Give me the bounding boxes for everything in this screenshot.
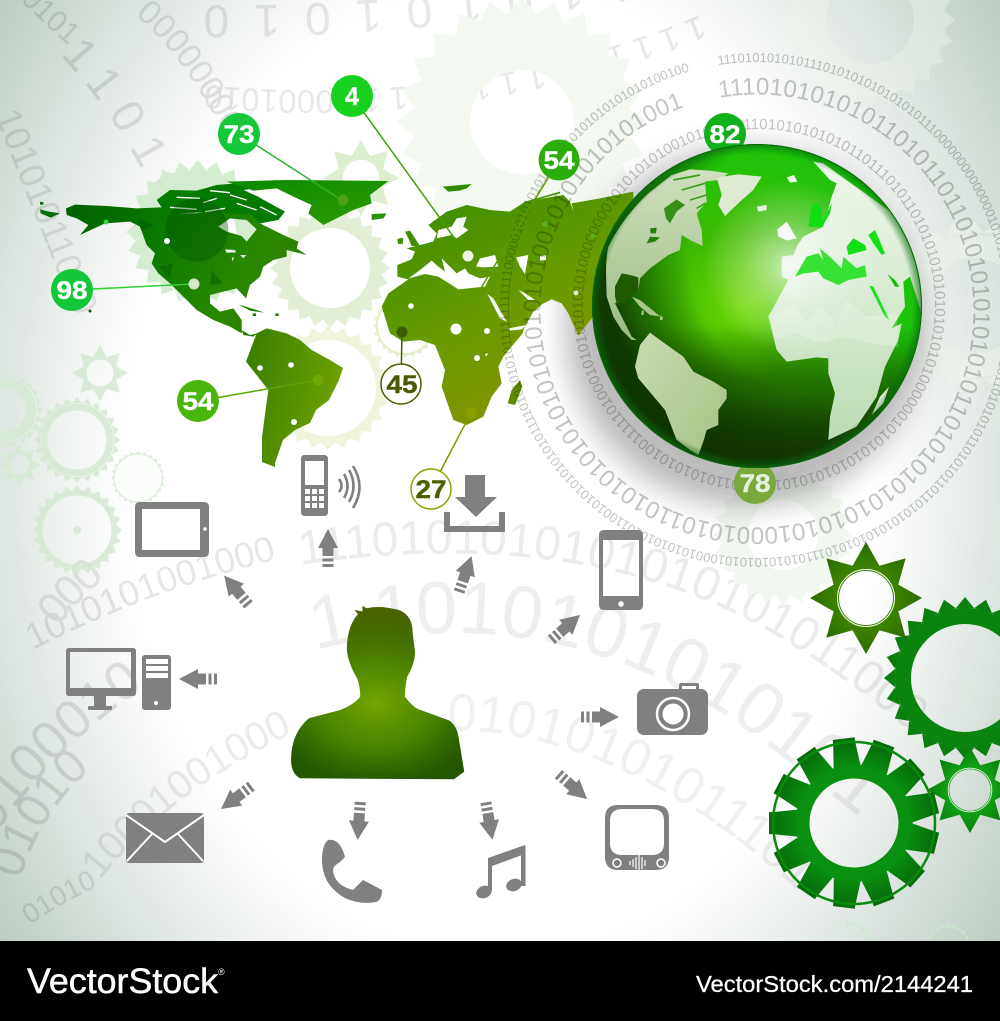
- background binary digits: 000: [39, 560, 100, 622]
- badge: 98: 98: [56, 277, 88, 305]
- Britain: [777, 222, 797, 241]
- arrow: to camera: [581, 707, 619, 727]
- gear shadow on Canada: [137, 198, 228, 285]
- arrow: to download: [450, 553, 481, 595]
- Madagascar on globe: [872, 387, 889, 415]
- icon: mobile phone with signal: [301, 455, 360, 516]
- background binary digits: 1010101001000: [27, 537, 273, 648]
- globe shadow: [565, 147, 925, 507]
- gear: star olive: [810, 542, 922, 654]
- Novaya Zemlya: [525, 192, 560, 202]
- globe: [590, 140, 930, 470]
- gears: left column: [0, 345, 169, 581]
- watermark logo: ®: [218, 967, 225, 977]
- arrow: to computer: [179, 669, 217, 689]
- Greenland on globe: [717, 174, 762, 216]
- badge: 73: 73: [224, 121, 254, 149]
- arrow: to tablet: [216, 569, 256, 611]
- Arctic channels: [170, 191, 277, 215]
- gear: West Africa: [369, 290, 441, 362]
- Iceland: [372, 213, 387, 220]
- gear: behind North America: [117, 151, 279, 313]
- binary rings around globe: [500, 52, 1000, 568]
- Aleutian islands: [40, 202, 60, 218]
- icon: tablet: [135, 502, 209, 557]
- gear: right of globe: [878, 210, 1000, 402]
- badge: 78: 78: [740, 470, 771, 498]
- Hudson Bay: [664, 199, 685, 223]
- Old World group: [372, 184, 633, 425]
- badge: 45: 45: [386, 371, 418, 399]
- icon: music note: [474, 845, 526, 901]
- icon: television: [605, 805, 669, 870]
- badge: 54 north: 54: [544, 147, 575, 175]
- watermark url: VectorStock.com/2144241: [696, 971, 973, 997]
- background binary digits: 01010: [22, 872, 94, 922]
- badge: 54 south: 54: [182, 388, 214, 416]
- Greenland: [227, 180, 388, 225]
- Canadian Arctic islands: [157, 180, 285, 223]
- map callouts: [51, 75, 776, 509]
- badge: 82: 82: [710, 121, 740, 149]
- gear: under globe: [704, 456, 862, 614]
- badge: 45: [381, 364, 421, 404]
- badge: 4: 4: [345, 83, 359, 111]
- badge: 54 north: [538, 140, 580, 180]
- background binary digits: 1110101010101010101011000: [301, 520, 926, 726]
- Great Lakes: [647, 228, 660, 243]
- arrow: to telephone: [348, 801, 370, 841]
- Caspian Sea: [868, 230, 885, 255]
- gear: large top centre: [381, 0, 663, 263]
- gear: Greenland: [323, 140, 399, 216]
- Baja California gap: [172, 287, 186, 305]
- gear: triangular teeth large: [873, 586, 1000, 770]
- background binary digits: 1 1010101010101: [313, 582, 868, 815]
- badge: 4: [331, 75, 373, 117]
- arrow: to envelope: [215, 778, 257, 817]
- North America on globe: [606, 169, 728, 340]
- zigzag gear reflection: [770, 300, 898, 347]
- callout lines: [72, 96, 559, 489]
- light glow: [708, 185, 846, 347]
- Persian Gulf: [888, 274, 899, 287]
- Eurasia and Africa on globe: [768, 162, 930, 440]
- Central America link: [242, 330, 257, 337]
- Arctic channels: [673, 175, 707, 208]
- gear: top right: [774, 0, 966, 116]
- background binary digits: 10001001000: [84, 712, 288, 878]
- badge: 73: [218, 113, 260, 155]
- Madagascar: [508, 380, 522, 405]
- Americas group: [40, 180, 343, 467]
- icon: smartphone: [599, 530, 643, 610]
- Eurasia and Africa: [382, 192, 633, 425]
- device icons: [66, 455, 708, 903]
- icon: envelope: [126, 813, 204, 863]
- arrows from person to devices: [179, 529, 619, 841]
- Caribbean islands: [238, 304, 279, 316]
- Ireland: [397, 238, 403, 244]
- Black Sea: [847, 238, 867, 255]
- gear: Atlantic lower: [258, 318, 398, 458]
- icon: telephone handset: [322, 840, 382, 903]
- gear: star small green: [927, 747, 1000, 833]
- North America: [66, 205, 307, 333]
- badge: 78: [734, 462, 776, 504]
- icon: computer tower: [142, 655, 171, 710]
- arrow: to music: [476, 801, 502, 841]
- gears: bottom edge: [838, 921, 975, 978]
- Svalbard on globe: [787, 175, 797, 183]
- arrow: to television: [552, 767, 594, 807]
- badge: 27: 27: [416, 476, 446, 504]
- badge: 54 south: [177, 380, 219, 422]
- gear cluster: [758, 542, 1000, 919]
- map dots: [164, 238, 578, 425]
- South America on globe: [635, 333, 727, 455]
- Cuba: [632, 297, 663, 320]
- gear: Atlantic upper: [262, 200, 398, 336]
- badge: 98: [51, 269, 93, 311]
- Red Sea: [869, 286, 889, 320]
- person silhouette: [291, 606, 464, 779]
- icon: camera: [637, 683, 708, 735]
- background binary digits: 1 1 1 1 1 1 1 1 1 1 1 1 1 00001010: [206, 16, 704, 114]
- gear: cog with rim: [758, 728, 950, 919]
- world map: [40, 180, 633, 467]
- Svalbard: [443, 184, 472, 192]
- footer bar: [0, 941, 1000, 1021]
- background binary digits: 1101011: [62, 40, 194, 214]
- South America: [246, 328, 343, 467]
- ring: medium: 1110101010101101011011010101010101011010101010101010100010101101010101010101010101010010101010101001: [524, 78, 990, 544]
- Mediterranean: [795, 248, 867, 285]
- badge: 82: [704, 113, 746, 155]
- watermark logo: VectorStock: [27, 962, 219, 1001]
- Iceland on globe: [757, 205, 767, 212]
- background binary digits: 01010101011101: [450, 694, 810, 890]
- icon: download: [444, 475, 505, 532]
- arrow: to mobile phone: [318, 529, 338, 567]
- arrow: to smartphone: [545, 607, 587, 647]
- icon: desktop monitor: [66, 648, 136, 710]
- Gulf of Mexico: [615, 273, 638, 303]
- Britain: [405, 231, 420, 246]
- Baltic: [808, 203, 832, 227]
- badge: 27: [411, 469, 451, 509]
